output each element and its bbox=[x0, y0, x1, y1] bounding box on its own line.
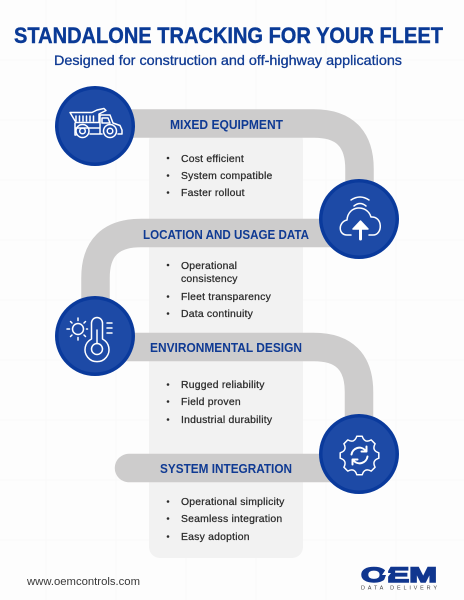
section: system integration bbox=[160, 462, 292, 543]
list: integration benefits: Operational simplicity bbox=[181, 497, 285, 508]
heading: mixed equipment: MIXED EQUIPMENT bbox=[170, 118, 283, 132]
icon: thermometer and sun bbox=[55, 296, 135, 376]
list: location and usage benefits: Data continuity bbox=[181, 309, 254, 320]
heading: environmental design: ENVIRONMENTAL DESIGN bbox=[150, 341, 302, 355]
list: environmental benefits: Field proven bbox=[181, 397, 241, 408]
list: location and usage benefits: Operational bbox=[181, 261, 237, 272]
subtitle: Designed for construction and off-highway applications bbox=[54, 52, 402, 68]
list: integration benefits: Easy adoption bbox=[181, 532, 250, 543]
icon: cloud upload bbox=[319, 179, 399, 259]
connector path bbox=[96, 124, 360, 468]
heading: location and usage data: LOCATION AND USAGE DATA bbox=[143, 228, 309, 242]
footer url: www.oemcontrols.com bbox=[26, 576, 140, 588]
logo: OEM Data Delivery bbox=[361, 564, 437, 592]
list: environmental benefits: Industrial durability bbox=[181, 415, 273, 426]
list: integration benefits bbox=[167, 497, 285, 543]
section: location and usage data bbox=[143, 228, 309, 320]
list: environmental benefits: Rugged reliability bbox=[181, 380, 265, 391]
list: mixed equipment benefits: System compatible bbox=[181, 171, 273, 182]
list: integration benefits: Seamless integration bbox=[181, 514, 282, 525]
icon: dump truck bbox=[55, 86, 135, 166]
icon: gear with sync arrows bbox=[319, 414, 399, 494]
list: location and usage benefits bbox=[167, 261, 272, 320]
list: mixed equipment benefits bbox=[167, 154, 273, 199]
list: location and usage benefits: consistency bbox=[181, 274, 238, 285]
list: location and usage benefits: Fleet transparency bbox=[181, 292, 272, 303]
logo: OEM Data Delivery: DATA DELIVERY bbox=[361, 586, 437, 592]
heading: system integration: SYSTEM INTEGRATION bbox=[160, 462, 292, 476]
content panel bbox=[149, 130, 303, 558]
section: environmental design bbox=[150, 341, 302, 426]
logo: OEM Data Delivery: OEM bbox=[361, 564, 437, 587]
list: environmental benefits bbox=[167, 380, 273, 426]
list: mixed equipment benefits: Cost efficient bbox=[181, 154, 244, 165]
list: mixed equipment benefits: Faster rollout bbox=[181, 188, 245, 199]
section: mixed equipment bbox=[167, 118, 283, 199]
